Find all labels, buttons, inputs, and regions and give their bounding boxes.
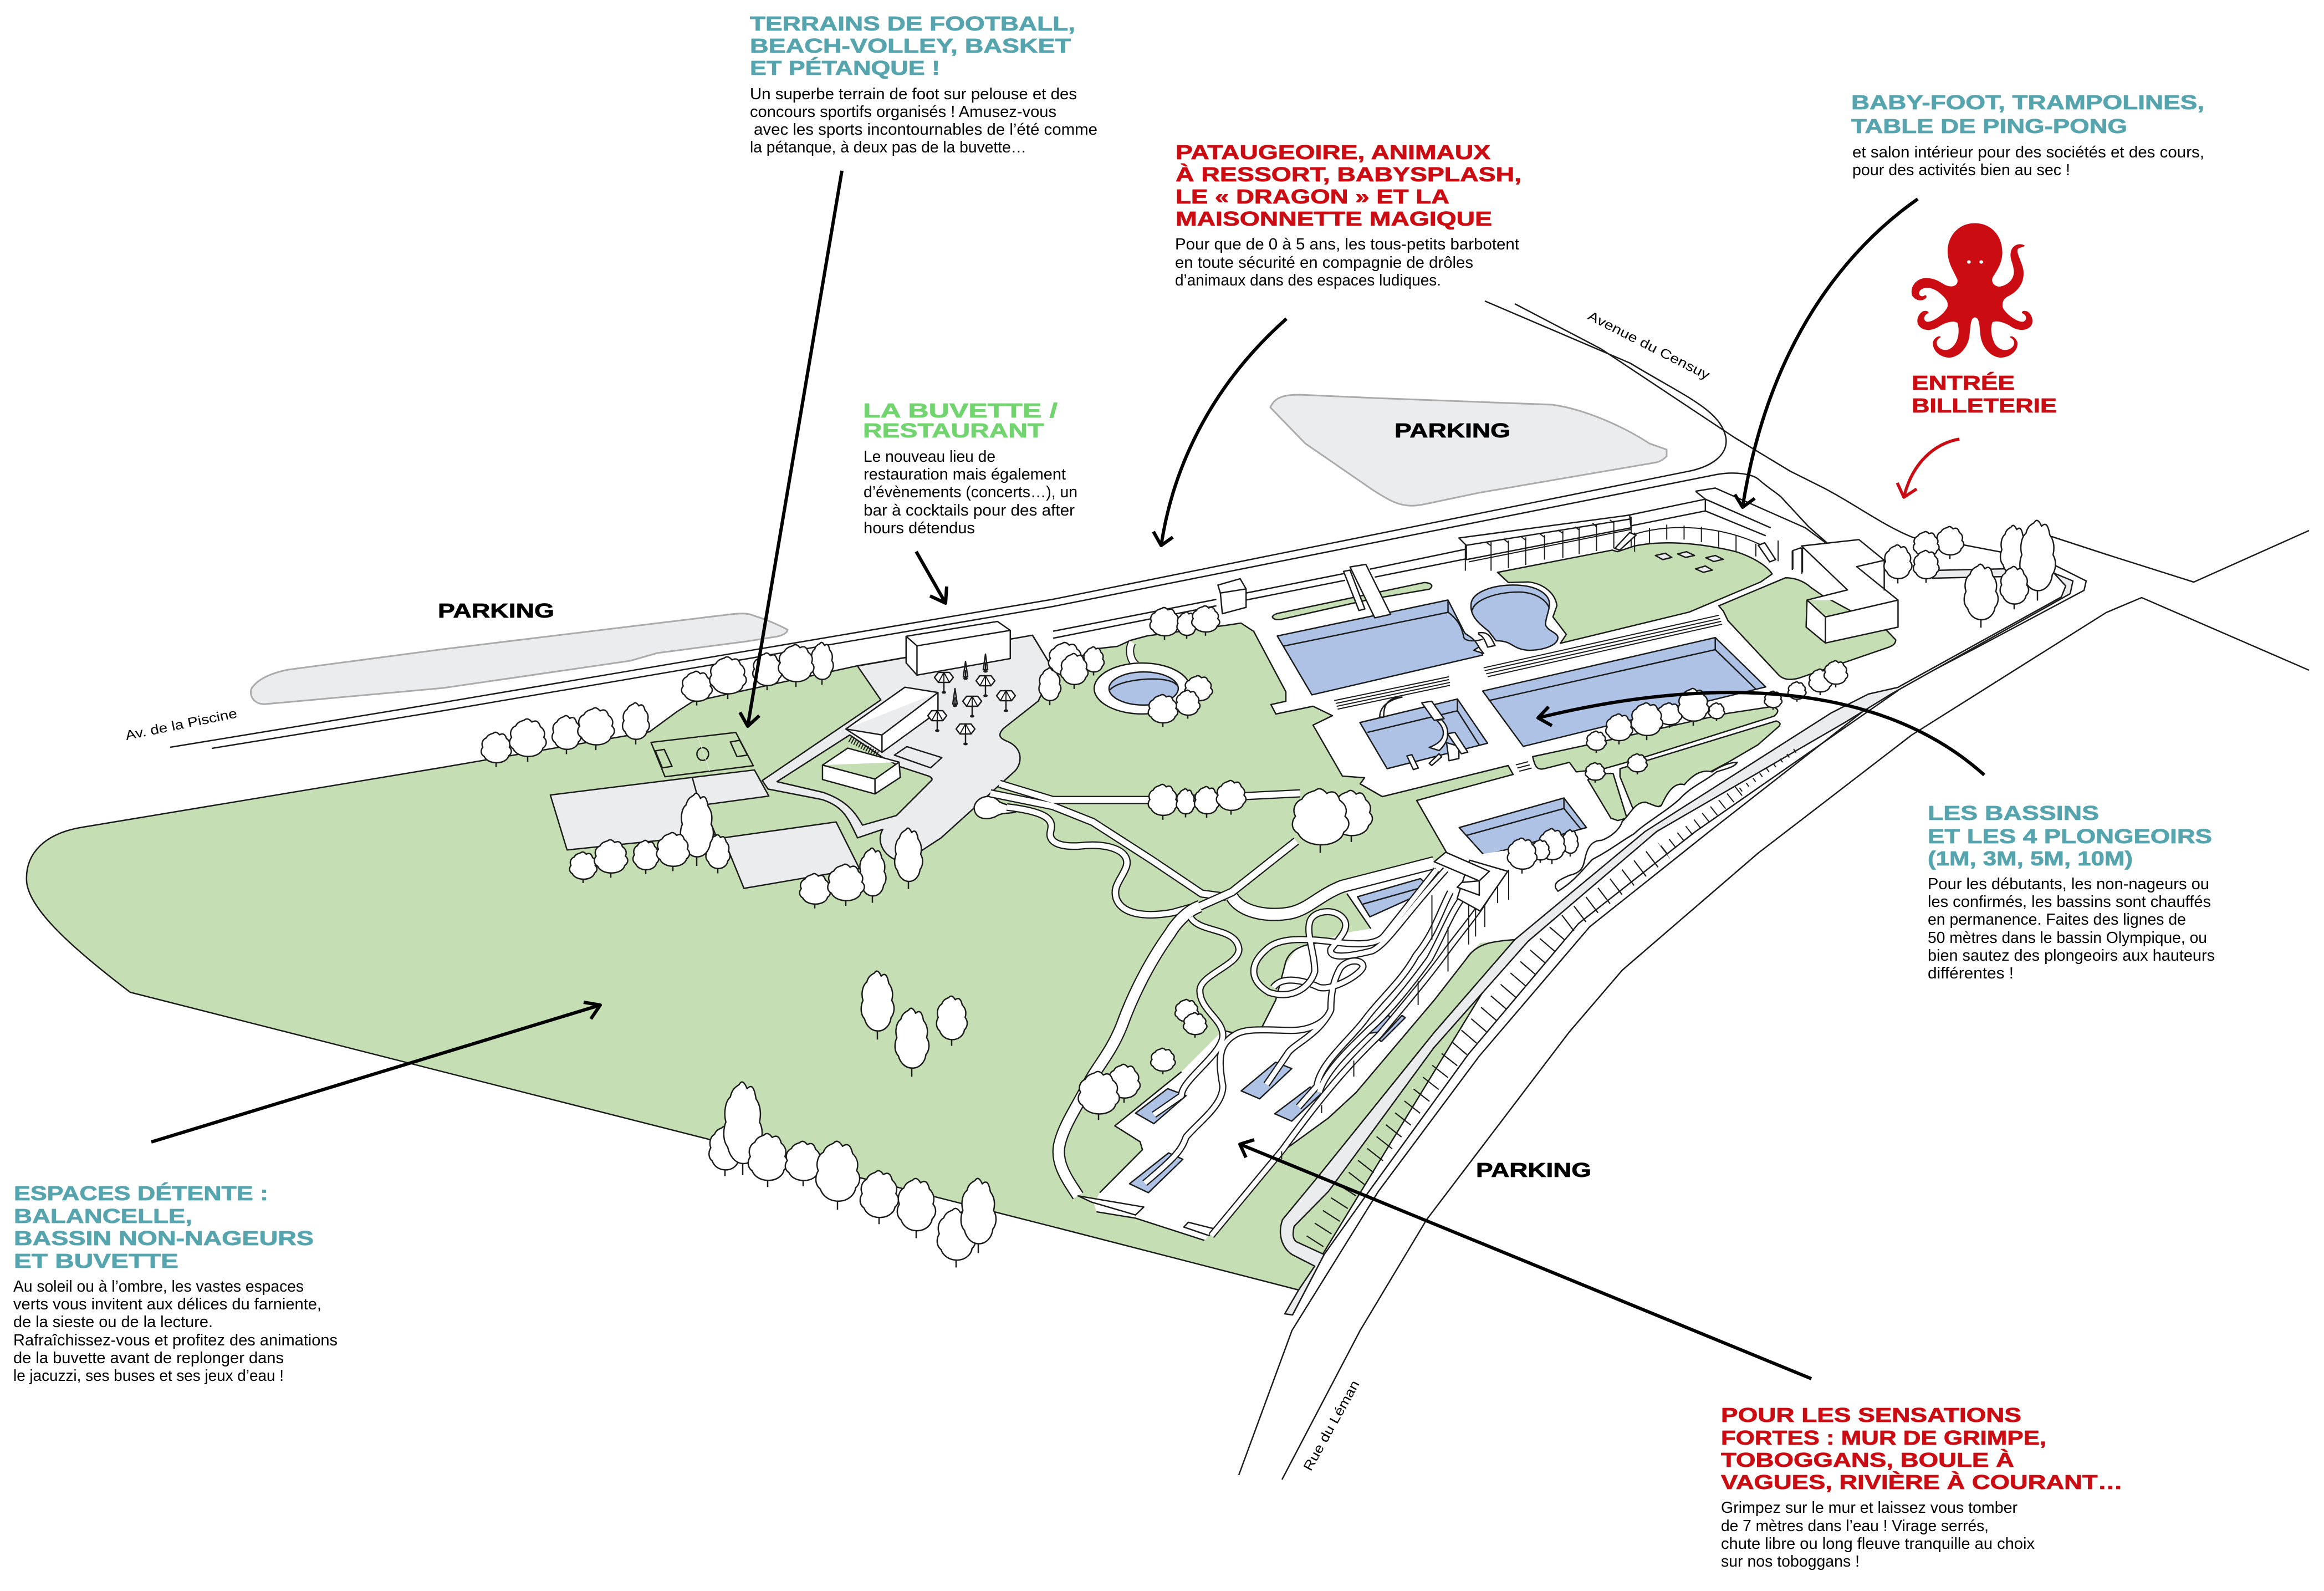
pool: slide basin bbox=[1357, 879, 1432, 917]
text block: baby-foot bbox=[1851, 91, 2204, 179]
body: espaces détente bbox=[13, 1278, 338, 1385]
body: buvette bbox=[864, 448, 1077, 537]
pool: fourth bbox=[1459, 798, 1586, 855]
slide tower bbox=[1434, 852, 1508, 911]
heading: baby-foot: TABLE DE PING-PONG bbox=[1851, 115, 2127, 137]
football pitch bbox=[651, 732, 753, 777]
body: football: la pétanque, à deux pas de la buvette… bbox=[750, 139, 1026, 156]
heading: espaces détente: ESPACES DÉTENTE : bbox=[14, 1182, 268, 1205]
arrow: buvette bbox=[916, 552, 947, 603]
lawn: near entrance bbox=[1719, 578, 1896, 680]
body: bassins: différentes ! bbox=[1928, 965, 2014, 982]
heading: football: TERRAINS DE FOOTBALL, bbox=[750, 12, 1075, 35]
small kiosk bbox=[1218, 579, 1246, 614]
labels: parking: PARKING bbox=[1395, 419, 1510, 442]
lawn: top strip bbox=[1273, 583, 1432, 620]
bridge connector bbox=[1479, 633, 1495, 647]
heading: baby-foot: BABY-FOOT, TRAMPOLINES, bbox=[1851, 91, 2204, 114]
fountain splash bbox=[974, 797, 1017, 819]
heading: entrée billeterie: BILLETERIE bbox=[1912, 394, 2057, 417]
building: restaurant long roof bbox=[846, 687, 938, 752]
body: espaces détente: le jacuzzi, ses buses et ses jeux d’eau ! bbox=[13, 1367, 284, 1385]
body: bassins: en permanence. Faites des lignes de bbox=[1928, 911, 2186, 929]
slide landing pools bbox=[1130, 1014, 1405, 1192]
building: kiosk block bbox=[906, 621, 1010, 675]
heading: pataugeoire bbox=[1176, 141, 1521, 230]
path ends bbox=[1078, 1196, 1144, 1215]
body: football: concours sportifs organisés ! Amusez-vous bbox=[750, 103, 1056, 121]
arrow: espaces détente bbox=[151, 1002, 600, 1142]
text block: pataugeoire bbox=[1175, 141, 1521, 289]
pool: free form lagoon bbox=[1471, 585, 1558, 650]
heading: espaces détente bbox=[14, 1182, 314, 1272]
heading: pataugeoire: LE « DRAGON » ET LA bbox=[1176, 185, 1449, 208]
heading: pataugeoire: À RESSORT, BABYSPLASH, bbox=[1176, 163, 1521, 186]
body: sensations fortes bbox=[1721, 1499, 2035, 1570]
terrace and sports area bbox=[550, 621, 1053, 888]
labels: parking bbox=[438, 419, 1591, 1181]
arrow: baby-foot bbox=[1735, 199, 1918, 507]
terrace: grey paving bbox=[762, 635, 1053, 860]
body: baby-foot: pour des activités bien au sec ! bbox=[1852, 161, 2070, 179]
body: sensations fortes: chute libre ou long fleuve tranquille au choix bbox=[1721, 1535, 2035, 1553]
diving platforms bbox=[1380, 697, 1468, 769]
slide stilts bbox=[1281, 870, 1509, 1159]
footpaths bbox=[990, 784, 1434, 1196]
heading: sensations fortes: VAGUES, RIVIÈRE À COURANT… bbox=[1721, 1471, 2123, 1493]
olympic pool bbox=[1483, 638, 1766, 746]
entrance building bbox=[1801, 539, 1898, 643]
deck outline bbox=[895, 747, 942, 768]
arrow: pataugeoire bbox=[1153, 319, 1286, 545]
heading: sensations fortes: FORTES : MUR DE GRIMPE, bbox=[1721, 1426, 2046, 1449]
pools and lawns: central complex bbox=[1053, 488, 1829, 771]
heading: sensations fortes: TOBOGGANS, BOULE À bbox=[1721, 1449, 2014, 1471]
body: bassins bbox=[1928, 875, 2215, 982]
body: bassins: 50 mètres dans le bassin Olympique, ou bbox=[1928, 929, 2207, 947]
walkway lines bbox=[1053, 488, 1829, 638]
heading: pataugeoire: MAISONNETTE MAGIQUE bbox=[1176, 207, 1492, 230]
heading: sensations fortes bbox=[1721, 1404, 2123, 1493]
fence bbox=[1635, 524, 1802, 574]
heading: football bbox=[750, 12, 1075, 79]
body: espaces détente: de la sieste ou de la lecture. bbox=[13, 1313, 213, 1331]
deck: white ground bbox=[1094, 850, 1545, 1241]
heading: bassins bbox=[1928, 802, 2212, 870]
heading: entrée billeterie bbox=[1912, 371, 2057, 417]
body: buvette: d’évènements (concerts…), un bbox=[864, 483, 1077, 501]
body: buvette: hours détendus bbox=[864, 519, 975, 537]
arrow: sensations bbox=[1240, 1140, 1811, 1379]
parking: left grey lot bbox=[251, 614, 788, 704]
heading: pataugeoire: PATAUGEOIRE, ANIMAUX bbox=[1176, 141, 1490, 164]
labels: streets: Avenue du Censuy bbox=[1585, 308, 1712, 383]
body: bassins: les confirmés, les bassins sont chauffés bbox=[1928, 893, 2211, 911]
body: pataugeoire: Pour que de 0 à 5 ans, les tous-petits barbotent bbox=[1175, 236, 1519, 253]
pond bbox=[1094, 642, 1190, 714]
heading: buvette: LA BUVETTE / bbox=[863, 399, 1058, 422]
slides: second set bbox=[1145, 883, 1494, 1236]
body: pataugeoire: d’animaux dans des espaces ludiques. bbox=[1175, 272, 1441, 289]
heading: baby-foot bbox=[1851, 91, 2204, 137]
benches bbox=[1334, 615, 1722, 771]
icon: red octopus bbox=[1912, 223, 2032, 358]
heading: bassins: (1M, 3M, 5M, 10M) bbox=[1928, 847, 2133, 870]
text block: sensations fortes bbox=[1721, 1404, 2123, 1570]
body: sensations fortes: Grimpez sur le mur et laissez vous tomber bbox=[1721, 1499, 2017, 1517]
heading: football: ET PÉTANQUE ! bbox=[750, 57, 940, 79]
pools and lawns: east complex bbox=[1459, 539, 1898, 891]
heading: bassins: ET LES 4 PLONGEOIRS bbox=[1928, 825, 2212, 848]
body: football bbox=[750, 85, 1097, 156]
footbridge bbox=[1350, 564, 1391, 618]
text block: terrains de football bbox=[750, 12, 1097, 156]
body: buvette: bar à cocktails pour des after bbox=[864, 502, 1075, 519]
text block: bassins bbox=[1928, 802, 2215, 982]
hatching bbox=[850, 739, 879, 755]
body: pataugeoire: en toute sécurité en compagnie de drôles bbox=[1175, 254, 1473, 272]
lawn: main park bbox=[27, 623, 1515, 1290]
diving pool bbox=[1360, 699, 1488, 769]
body: espaces détente: verts vous invitent aux délices du farniente, bbox=[13, 1296, 321, 1313]
labels: parking: PARKING bbox=[438, 599, 554, 622]
heading: entrée billeterie: ENTRÉE bbox=[1912, 371, 2015, 394]
slides: loop bbox=[1254, 870, 1446, 995]
body: bassins: bien sautez des plongeoirs aux hauteurs bbox=[1928, 947, 2215, 965]
heading: espaces détente: BALANCELLE, bbox=[14, 1205, 192, 1227]
heading: buvette: RESTAURANT bbox=[863, 419, 1044, 442]
court: left bbox=[550, 777, 716, 850]
body: pataugeoire bbox=[1175, 236, 1519, 289]
body: espaces détente: Au soleil ou à l’ombre, les vastes espaces bbox=[13, 1278, 304, 1296]
body: espaces détente: de la buvette avant de replonger dans bbox=[13, 1349, 284, 1367]
body: baby-foot bbox=[1852, 144, 2204, 179]
heading: bassins: LES BASSINS bbox=[1928, 802, 2099, 824]
text block: buvette bbox=[863, 399, 1077, 537]
lawn: strip by olympic pool bbox=[1533, 707, 1778, 772]
lawn: triangular bbox=[1620, 721, 1780, 817]
labels: streets: Av. de la Piscine bbox=[124, 706, 238, 743]
body: espaces détente: Rafraîchissez-vous et profitez des animations bbox=[13, 1332, 338, 1349]
umbrellas bbox=[928, 654, 1015, 745]
lawn: top big bbox=[1498, 543, 1772, 643]
labels: streets bbox=[124, 308, 1712, 1473]
pool: main bbox=[1277, 600, 1483, 695]
arrow: entrance bbox=[1897, 439, 1959, 497]
access road: grey strip bbox=[1280, 573, 2073, 1315]
court: centre bbox=[692, 770, 769, 805]
building: restaurant block bbox=[823, 748, 900, 794]
body: football: Un superbe terrain de foot sur pelouse et des bbox=[750, 85, 1077, 103]
arrow: football bbox=[740, 171, 842, 726]
body: buvette: Le nouveau lieu de bbox=[864, 448, 995, 466]
lawn: terrace island bbox=[777, 735, 932, 825]
labels: streets: Rue du Léman bbox=[1301, 1378, 1362, 1473]
body: buvette: restauration mais également bbox=[864, 466, 1066, 483]
heading: sensations fortes: POUR LES SENSATIONS bbox=[1721, 1404, 2021, 1426]
heading: espaces détente: BASSIN NON-NAGEURS bbox=[14, 1227, 314, 1250]
body: sensations fortes: de 7 mètres dans l’eau ! Virage serrés, bbox=[1721, 1517, 1989, 1535]
paving stones bbox=[1656, 552, 1723, 572]
heading: buvette bbox=[863, 399, 1058, 442]
heading: espaces détente: ET BUVETTE bbox=[14, 1250, 178, 1272]
heading: football: BEACH-VOLLEY, BASKET bbox=[750, 34, 1071, 57]
body: bassins: Pour les débutants, les non-nageurs ou bbox=[1928, 875, 2209, 893]
parking: top grey lot bbox=[1270, 395, 1667, 506]
text block: espaces détente bbox=[13, 1182, 338, 1385]
slide zone: deck bbox=[990, 784, 1545, 1241]
body: football: avec les sports incontournables de l’été comme bbox=[754, 121, 1097, 139]
roads: street lines bbox=[170, 301, 2309, 1480]
court: right bbox=[723, 822, 860, 888]
arrow: bassins bbox=[1538, 692, 1984, 775]
parking stalls bbox=[1315, 748, 1799, 1242]
body: sensations fortes: sur nos toboggans ! bbox=[1721, 1553, 1860, 1570]
tiered cabins bbox=[1459, 515, 1631, 560]
lawn: small bbox=[1588, 773, 1627, 820]
labels: parking: PARKING bbox=[1476, 1159, 1591, 1181]
body: baby-foot: et salon intérieur pour des sociétés et des cours, bbox=[1852, 144, 2204, 161]
map: site plan bbox=[27, 301, 2309, 1480]
trees bbox=[481, 521, 2056, 1267]
hedge bbox=[1555, 762, 1737, 891]
